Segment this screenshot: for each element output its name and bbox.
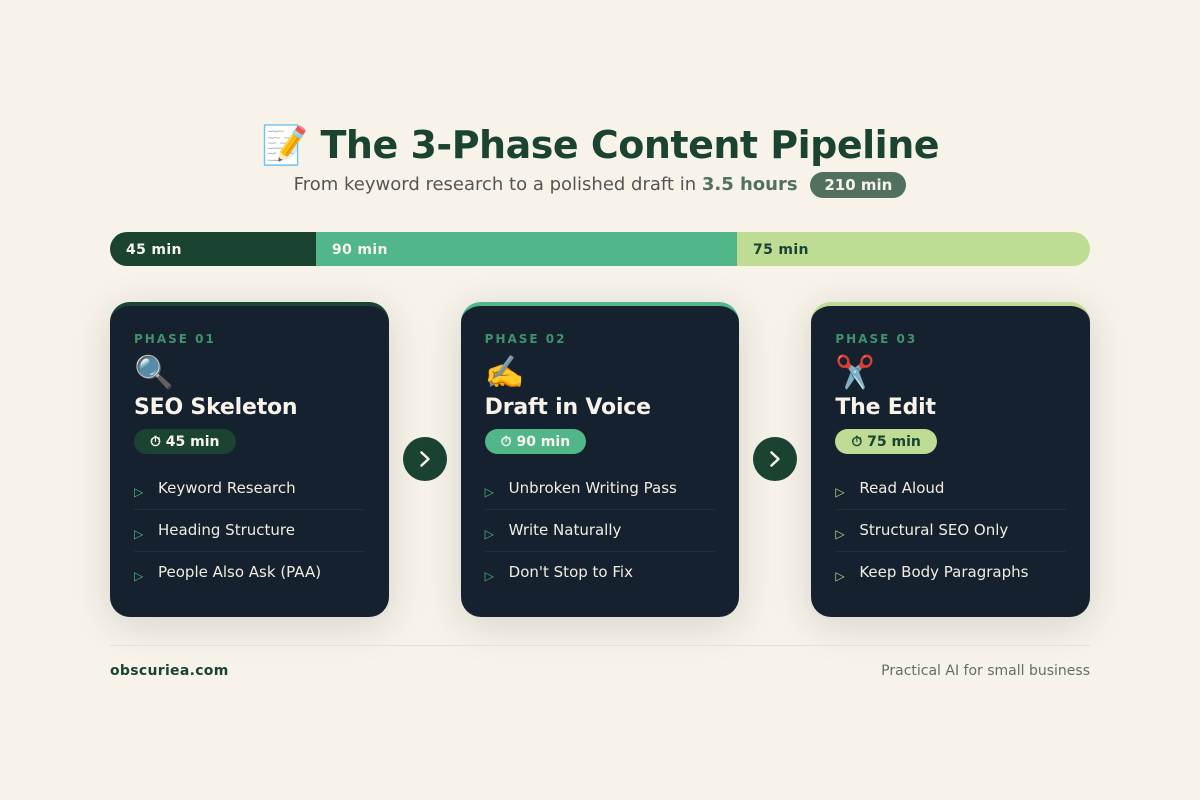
- list item: [485, 468, 715, 510]
- title: 📝 The 3-Phase Content Pipeline: [261, 123, 939, 167]
- footer: [110, 645, 1090, 681]
- phase heading: Draft in Voice: [485, 395, 651, 420]
- time badge: ⏱ 45 min: [150, 434, 220, 450]
- icon: magnifying glass: 🔍: [134, 353, 174, 391]
- footer tagline: Practical AI for small business: [881, 663, 1090, 679]
- phase label: PHASE 03: [835, 332, 917, 346]
- list item: [134, 510, 365, 552]
- list item: [134, 468, 365, 510]
- list item: ▷: [134, 527, 143, 541]
- segment: 90 min: 90 min: [332, 242, 388, 258]
- segment: 90 min: [316, 232, 737, 266]
- list item: Unbroken Writing Pass: [509, 479, 677, 497]
- time badge: [835, 429, 937, 454]
- list item: ▷: [835, 569, 845, 583]
- list item: Keep Body Paragraphs: [859, 563, 1028, 581]
- arrow: [753, 437, 797, 481]
- arrow: [403, 437, 447, 481]
- panel: phase 03: [811, 302, 1090, 617]
- phase label: PHASE 01: [134, 332, 216, 346]
- list item: ▷: [485, 527, 494, 541]
- phase heading: The Edit: [835, 395, 936, 420]
- segment: 75 min: 75 min: [753, 242, 809, 258]
- segment: 45 min: 45 min: [126, 242, 182, 258]
- list item: Heading Structure: [158, 521, 295, 539]
- panel: phase 01: [110, 302, 389, 617]
- list item: People Also Ask (PAA): [158, 563, 321, 581]
- time badge: [134, 429, 236, 454]
- time badge: ⏱ 75 min: [851, 434, 921, 450]
- list item: ▷: [835, 485, 845, 499]
- list item: Structural SEO Only: [859, 521, 1008, 539]
- list item: [485, 510, 715, 552]
- time badge: [485, 429, 586, 454]
- segment: 75 min: [737, 232, 1090, 266]
- subtitle: From keyword research to a polished draft in 3.5 hours: [294, 174, 798, 195]
- list item: ▷: [485, 485, 494, 499]
- segment: 45 min: [110, 232, 316, 266]
- icon: scissors: ✂️: [835, 353, 875, 391]
- phase heading: SEO Skeleton: [134, 395, 297, 420]
- list item: ▷: [835, 527, 845, 541]
- phase label: PHASE 02: [485, 332, 566, 346]
- list item: ▷: [134, 485, 143, 499]
- list item: Read Aloud: [859, 479, 944, 497]
- list item: Write Naturally: [509, 521, 621, 539]
- panel: phase 02: [461, 302, 739, 617]
- list item: [835, 510, 1066, 552]
- icon: writing hand: ✍️: [485, 353, 524, 391]
- footer brand: obscuriea.com: [110, 663, 229, 679]
- timeline bar: [110, 232, 1090, 266]
- list item: [835, 468, 1066, 510]
- list item: ▷: [134, 569, 143, 583]
- subtitle: 210 min: [824, 176, 892, 194]
- subtitle: [294, 172, 906, 198]
- list item: ▷: [485, 569, 494, 583]
- list item: Don't Stop to Fix: [509, 563, 633, 581]
- list item: Keyword Research: [158, 479, 296, 497]
- time badge: ⏱ 90 min: [501, 434, 570, 450]
